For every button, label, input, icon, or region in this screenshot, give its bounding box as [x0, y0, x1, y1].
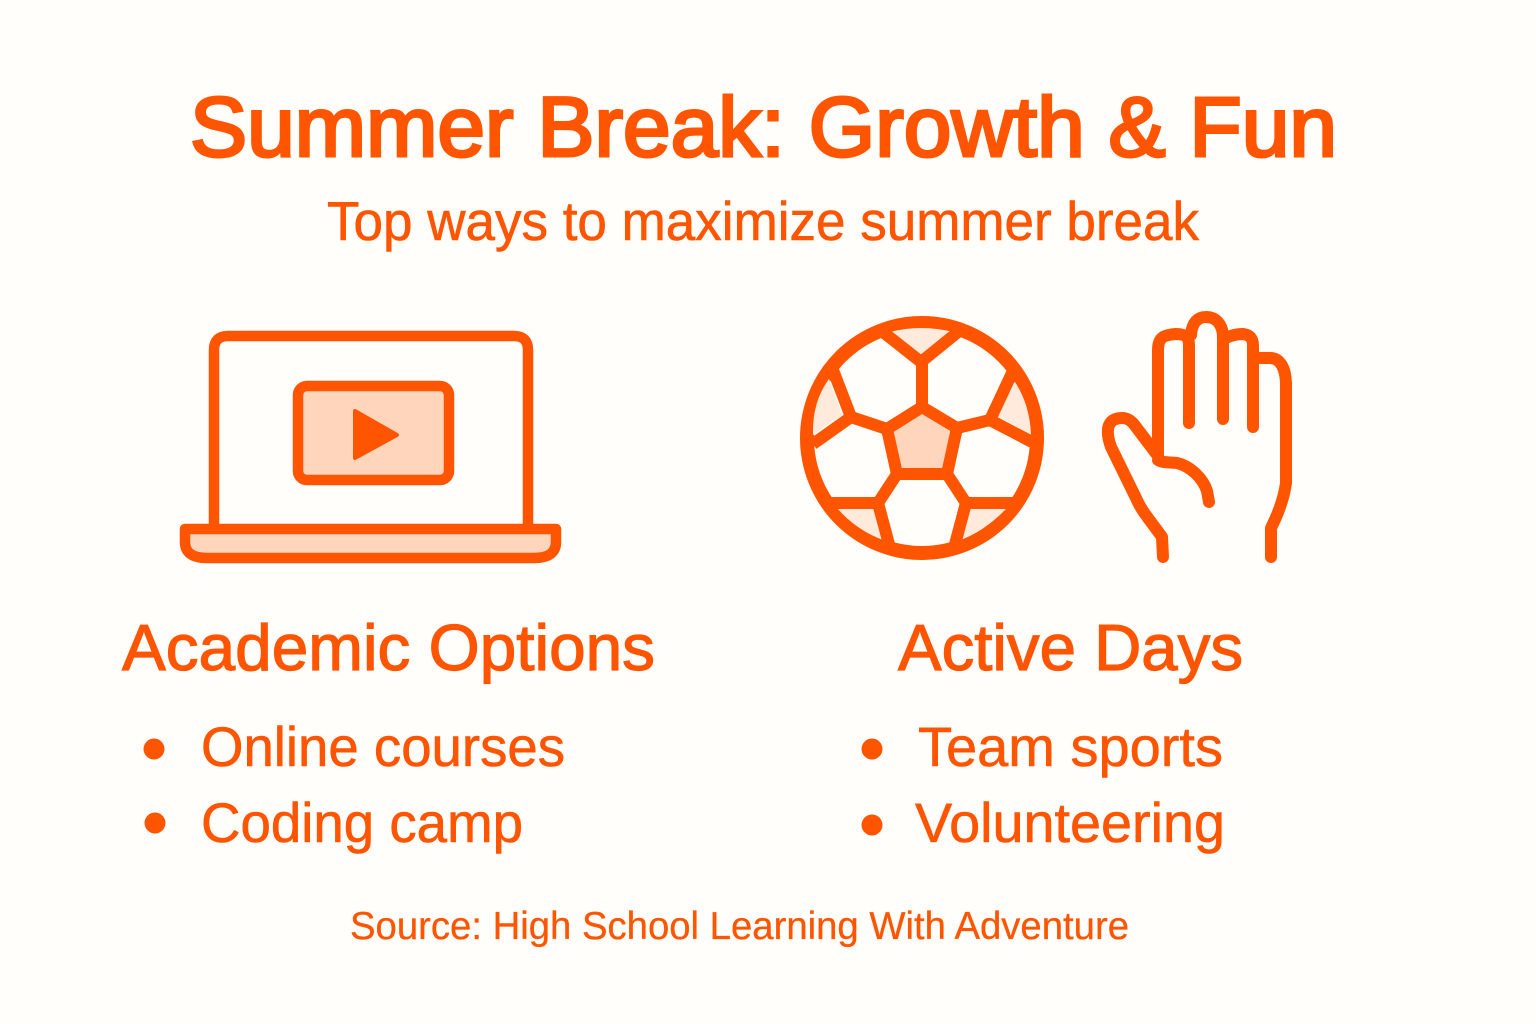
heading: academic options: Academic Options	[122, 611, 655, 684]
icon: soccer ball	[807, 323, 1037, 553]
subtitle: Top ways to maximize summer break	[327, 190, 1199, 252]
list: academic options	[144, 715, 565, 854]
title: Summer Break: Growth & Fun	[190, 80, 1337, 174]
list: active days: Volunteering	[915, 791, 1225, 854]
list: academic options: Coding camp	[201, 791, 523, 854]
heading: active days: Active Days	[898, 611, 1243, 684]
source note: Source: High School Learning With Adventure	[350, 905, 1129, 948]
list: academic options: Online courses	[201, 715, 565, 778]
list: active days: Team sports	[918, 715, 1223, 778]
icon: laptop with video player	[185, 336, 556, 558]
list: active days	[862, 715, 1225, 854]
icon: raised hand	[1108, 317, 1286, 557]
